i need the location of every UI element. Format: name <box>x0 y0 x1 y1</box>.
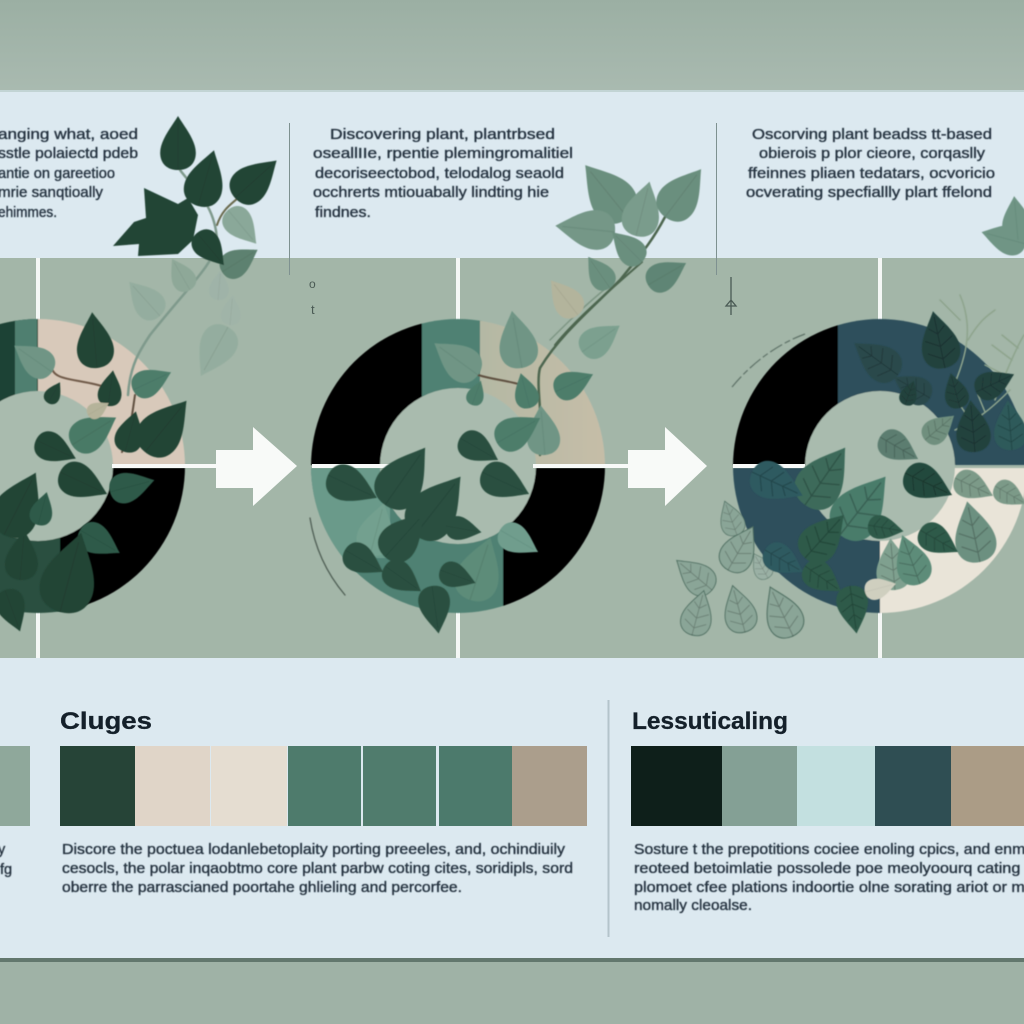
text block: Lessuticaling description: Sosture t the prepotitions cociee enoling cpics, and enme <box>634 842 1024 858</box>
text block: Cluges description: cesocls, the polar inqaobtmo core plant parbw coting cites, soridipls, sord <box>62 861 573 877</box>
plant: vine 2 <box>310 151 717 636</box>
ring chart 3 <box>732 318 1024 614</box>
annotation glyphs 2: t <box>311 302 315 317</box>
text block 2: Discovering plant, plantrbsed <box>330 127 555 143</box>
text block 3 <box>746 127 995 201</box>
stems 2 <box>310 217 665 595</box>
swatch stub left <box>0 746 30 826</box>
text block 2: occhrerts mtiouabally lindting hie <box>313 185 549 201</box>
text fragment left <box>0 842 12 878</box>
faded upper leaves 1 <box>118 201 267 385</box>
text block 3: Oscorving plant beadss tt-based <box>752 127 992 143</box>
white vertical connector lines <box>36 258 882 658</box>
palette: Lessuticaling swatches <box>631 746 1024 826</box>
white connector lines and arrows <box>112 427 805 506</box>
plant: vine 3 <box>667 195 1024 644</box>
text block: Lessuticaling description <box>634 842 1024 914</box>
text fragment left: fg <box>0 862 12 878</box>
text block 3: obierois p plor cieore, corqaslly <box>759 146 986 162</box>
palette: Cluges swatches <box>60 746 587 826</box>
text block 2: findnes. <box>315 205 371 221</box>
ring chart 1 <box>0 318 186 614</box>
text block: Cluges description: Discore the poctuea lodanlebetoplaity porting preeeles, and, ochindiuily <box>62 842 566 858</box>
teal upper leaves 3 <box>844 307 1024 514</box>
ring chart 2 <box>310 318 606 614</box>
text block: Lessuticaling description: plomoet cfee plations indoortie olne sorating ariot or me <box>634 880 1024 896</box>
arrow 2 <box>628 427 707 506</box>
background foliage 3 <box>940 295 1024 430</box>
text block: Cluges description <box>62 842 573 896</box>
dark upper leaves 1 <box>113 116 289 274</box>
lower leaves 3 <box>744 434 1000 636</box>
upper leaves 2 <box>539 151 717 364</box>
annotation glyphs 3 <box>726 277 736 315</box>
corner leaves 3 <box>978 195 1024 259</box>
top band <box>0 0 1024 90</box>
dashed arc 3 <box>732 334 805 387</box>
text block: Lessuticaling description: reoteed betoimlatie possolede poe meolyoourq cating d <box>634 861 1024 877</box>
stems 1 <box>52 170 238 452</box>
text block 2 <box>313 127 573 221</box>
small annotation marks <box>309 277 736 317</box>
lower leaves 1 <box>0 311 203 636</box>
text block 3: ffeinnes pliaen tedatars, ocvoricio <box>748 166 995 182</box>
heading: Cluges: Cluges <box>60 708 152 735</box>
text block 1: anging what, aoed <box>0 127 138 143</box>
text block 2: oseallIIe, rpentie plemingromalitiel <box>313 146 573 162</box>
text block 1 <box>0 127 138 221</box>
arrow 1 <box>216 427 297 506</box>
annotation glyphs 1: o <box>309 277 316 291</box>
bottom text blocks <box>0 842 1024 914</box>
top text blocks <box>0 127 995 221</box>
panel: sage middle band <box>0 258 1024 658</box>
text block 3: ocverating specfiallly plart ffelond <box>746 185 992 201</box>
outlined leaves 3 <box>667 497 809 644</box>
text block 1: mrie sanqtioally <box>0 185 104 201</box>
text block 1: sstle polaiectd pdeb <box>0 146 138 162</box>
text block: Cluges description: oberre the parrascianed poortahe ghlieling and percorfee. <box>62 880 462 896</box>
text block 2: decoriseectobod, telodalog seaold <box>315 166 564 182</box>
text block 1: antie on gareetioo <box>0 166 115 182</box>
heading: Lessuticaling: Lessuticaling <box>632 708 788 735</box>
plant: vine 1 <box>0 116 289 636</box>
lower leaves 2 <box>320 308 599 636</box>
text block: Lessuticaling description: nomally cleoalse. <box>634 898 752 914</box>
